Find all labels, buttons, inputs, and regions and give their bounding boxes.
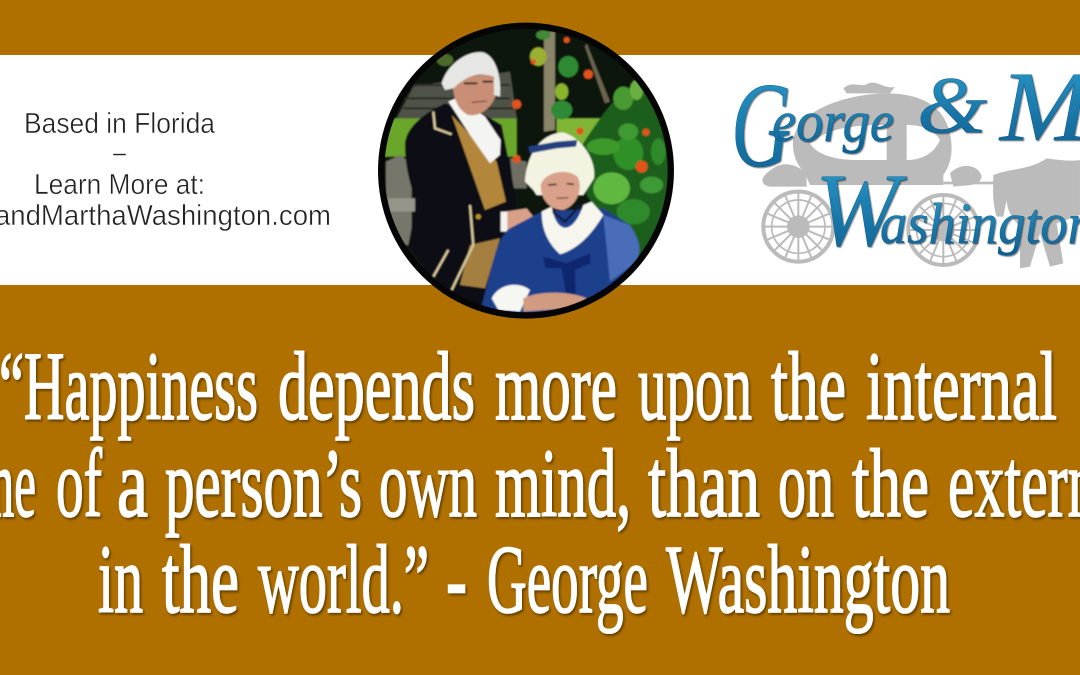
quote line 1: upon xyxy=(638,333,752,440)
quote line 2: own xyxy=(379,430,477,537)
George: wig xyxy=(442,52,500,97)
George: cravat xyxy=(448,98,501,163)
George: coat xyxy=(405,103,517,308)
Martha: blue bow xyxy=(543,253,591,298)
foliage xyxy=(580,83,670,262)
contact text block xyxy=(0,108,331,232)
Martha: sleeve and hands xyxy=(492,285,530,312)
Martha: white collar xyxy=(542,202,603,254)
flowers xyxy=(512,37,650,173)
Martha: dress xyxy=(482,208,639,315)
contact text block: Based in Florida xyxy=(24,108,216,140)
white band xyxy=(0,55,1080,285)
quote line 1: more xyxy=(495,333,617,440)
portrait photo xyxy=(370,15,680,325)
quote line 2: of xyxy=(56,430,102,537)
logo text: eorge xyxy=(772,89,894,154)
Martha: cap and face xyxy=(525,132,594,195)
icon: carriage and horse xyxy=(762,83,1080,268)
quote line 2: mind, xyxy=(495,430,631,537)
George: hand xyxy=(503,208,533,230)
quote line 3: - xyxy=(446,526,467,633)
contact text block: – xyxy=(113,137,127,169)
quote line 3: George xyxy=(487,526,648,633)
quote line 3: in xyxy=(98,526,143,633)
fence xyxy=(386,155,412,245)
contact text block: Learn More at: xyxy=(34,169,205,201)
quote line 3: world.” xyxy=(258,526,429,633)
quote line 1: the xyxy=(771,333,846,440)
quote line 3: the xyxy=(162,526,239,633)
black ring xyxy=(378,23,674,319)
quote text xyxy=(0,333,1080,633)
George: waistcoat xyxy=(452,115,506,210)
logo: carriage and script name xyxy=(731,51,1080,268)
quote line 1: depends xyxy=(278,333,475,440)
logo text xyxy=(731,51,1080,268)
logo text: W xyxy=(815,153,907,268)
quote line 1: “Happiness xyxy=(0,333,258,440)
quote line 2: the xyxy=(852,430,929,537)
quote line 2: than xyxy=(648,430,760,537)
quote line 2: a xyxy=(117,430,148,537)
logo text: G xyxy=(731,58,791,193)
quote line 2: person’s xyxy=(165,430,362,537)
quote line 3 xyxy=(98,526,950,633)
logo text: & xyxy=(917,62,987,150)
quote line 2 xyxy=(0,430,1080,537)
George: face xyxy=(453,73,496,115)
quote line 1 xyxy=(0,333,1057,440)
quote line 2: on xyxy=(778,430,834,537)
